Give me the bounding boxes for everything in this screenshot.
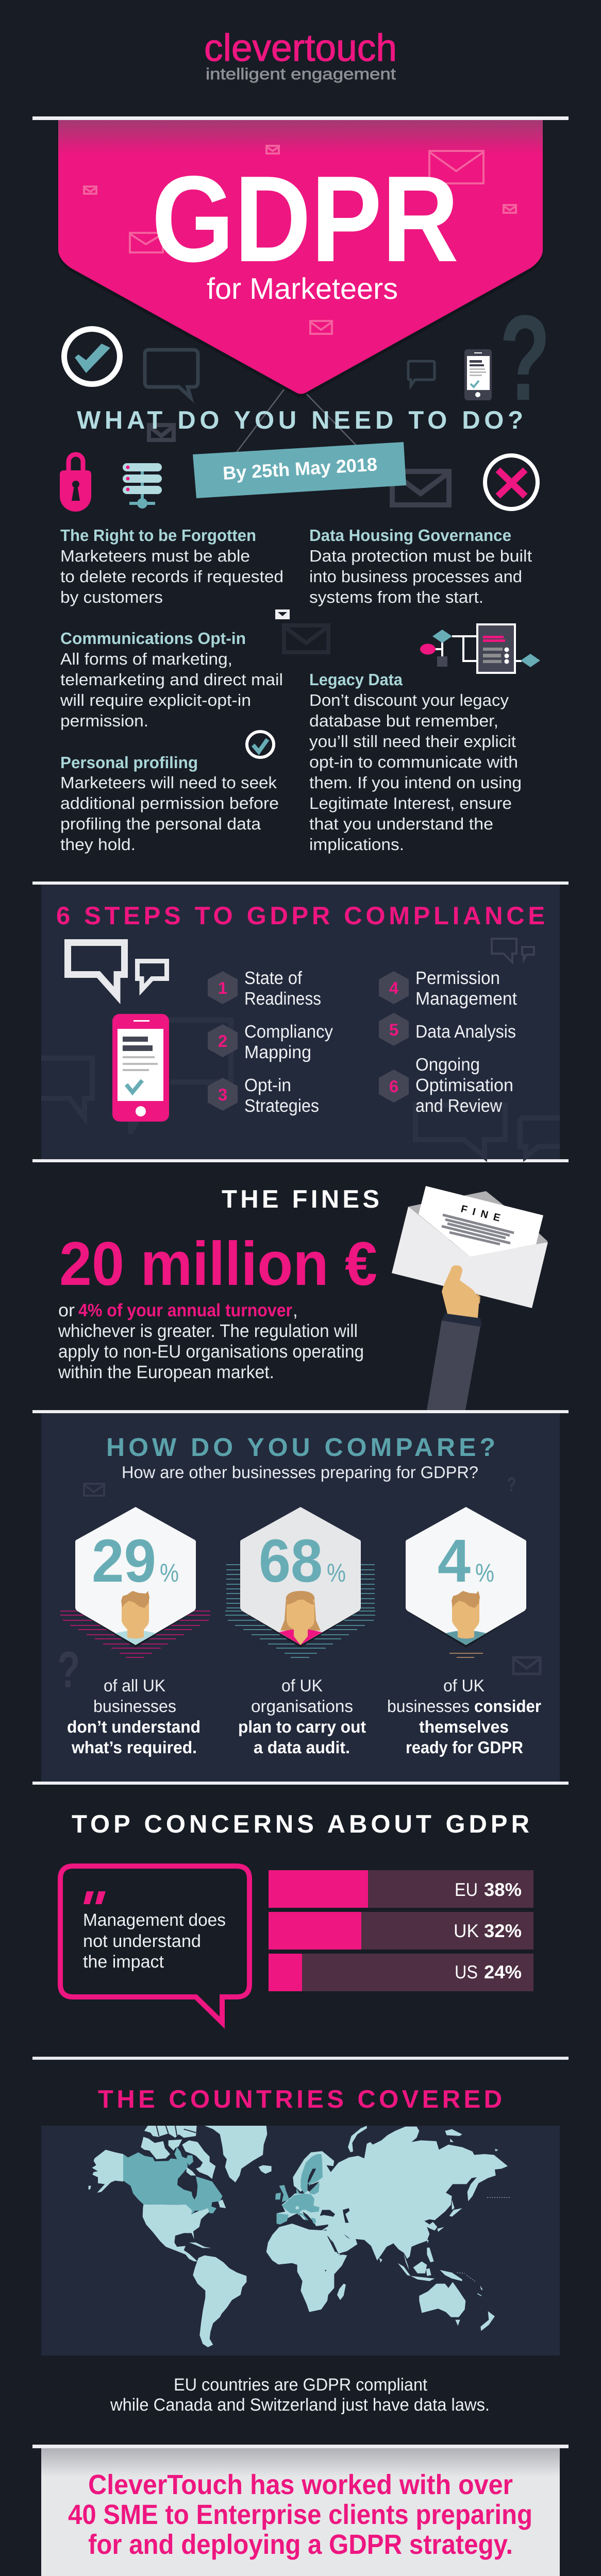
- text block: legacy data: [309, 670, 522, 854]
- heading: the fines: THE FINES: [222, 1185, 379, 1213]
- caption: 4 percent: consider: [474, 1697, 541, 1716]
- headline: clevertouch experience: 40 SME to Enterprise clients preparing: [68, 2499, 532, 2530]
- stat card: 68 percent: 68: [259, 1527, 323, 1595]
- step 4: 4: [389, 978, 399, 997]
- icon: small chat bubble: [408, 361, 435, 386]
- stat card: 68 percent: %: [327, 1558, 346, 1587]
- stat card: 4 percent: 4: [438, 1527, 471, 1595]
- step 2: 2: [218, 1031, 227, 1050]
- faint decorative icons: ?: [57, 1641, 80, 1699]
- step 5: Data Analysis: [415, 1022, 516, 1042]
- headline: clevertouch experience: CleverTouch has worked with over: [88, 2469, 513, 2500]
- icon: padlock: [60, 454, 91, 512]
- text block: personal profiling: [60, 753, 279, 854]
- deadline sign: By 25th May 2018: [222, 453, 378, 484]
- caption: 68 percent: of UK: [281, 1676, 323, 1695]
- step 5: 5: [389, 1020, 398, 1039]
- logo: top clevertouch: clevertouch: [204, 26, 397, 69]
- icon: check circle: [64, 329, 120, 384]
- caption: 68 percent: organisations: [251, 1697, 353, 1716]
- step 6: Ongoing: [415, 1055, 480, 1075]
- subheading: How are other businesses preparing for GDPR?: [122, 1463, 478, 1482]
- text block: legacy data: implications.: [309, 835, 404, 854]
- text block: legacy data: Legitimate Interest, ensure: [309, 794, 512, 812]
- text block: the right to be forgotten: to delete records if requested: [60, 567, 283, 586]
- step 2: Mapping: [244, 1042, 311, 1062]
- map caption: [110, 2375, 490, 2415]
- text block: personal profiling: Personal profiling: [60, 753, 198, 772]
- logo: top clevertouch: intelligent engagement: [206, 65, 396, 83]
- bar: UK 32%: [269, 1912, 533, 1950]
- text block: communications opt-in: All forms of marketing,: [60, 650, 232, 668]
- step 6: Optimisation: [415, 1075, 513, 1095]
- bar: US 24%: US: [455, 1961, 478, 1982]
- text block: personal profiling: profiling the personal data: [60, 815, 261, 833]
- callout: quote bubble: [60, 1866, 249, 2023]
- text block: data housing governance: Data Housing Governance: [309, 526, 511, 545]
- caption: 29 percent: don’t understand: [67, 1717, 201, 1736]
- text block: legacy data: opt-in to communicate with: [309, 753, 518, 771]
- text block: data housing governance: systems from the start.: [309, 588, 483, 606]
- caption: 29 percent: what’s required.: [71, 1738, 197, 1757]
- bar chart: [269, 1870, 533, 1991]
- text block: fines detail: apply to non-EU organisations operating: [58, 1342, 364, 1362]
- icon: flow diagram: [420, 624, 540, 673]
- section: the fines: [58, 1185, 548, 1410]
- person: male, light shirt: [115, 1591, 156, 1645]
- icon: question mark: ?: [499, 290, 550, 426]
- icon: pink phone: [112, 1014, 169, 1122]
- caption: 4 percent: [387, 1676, 541, 1757]
- subtitle: for Marketeers: for Marketeers: [207, 272, 398, 306]
- text block: legacy data: them. If you intend on using: [309, 773, 522, 792]
- headline: clevertouch experience: [68, 2469, 532, 2560]
- faint decorative icons: ?: [507, 1473, 516, 1496]
- stat card: 4 percent: [387, 1507, 541, 1757]
- stat card: 29 percent: [60, 1507, 210, 1757]
- icon: server: [123, 463, 162, 509]
- illustration: hand holding fine envelope: [392, 1186, 548, 1410]
- stat: 20 million euro: 20 million €: [59, 1229, 377, 1298]
- callout: quote bubble: the impact: [83, 1952, 164, 1972]
- icons: banner envelopes: [84, 146, 516, 334]
- faint decorative icons: [57, 1473, 540, 1699]
- text block: fines detail: 4% of your annual turnover: [78, 1300, 292, 1320]
- text block: personal profiling: Marketeers will need to seek: [60, 773, 277, 792]
- bar: UK 32%: UK: [454, 1920, 479, 1941]
- person: female, pink top: [279, 1591, 322, 1645]
- heading: how do you compare: HOW DO YOU COMPARE?: [106, 1433, 495, 1462]
- text block: fines detail: or: [58, 1300, 75, 1320]
- caption: 29 percent: of all UK: [104, 1676, 165, 1695]
- icon: phone: [464, 349, 492, 400]
- icon: cross circle: [485, 455, 538, 509]
- callout: quote bubble: not understand: [83, 1931, 201, 1951]
- text block: fines detail: within the European market.: [58, 1362, 274, 1382]
- text block: data housing governance: into business processes and: [309, 567, 522, 586]
- hero banner: [58, 120, 543, 398]
- deadline sign: [193, 442, 406, 498]
- caption: 4 percent: themselves: [419, 1717, 509, 1736]
- map caption: while Canada and Switzerland just have data laws.: [110, 2395, 490, 2415]
- step 5: [379, 1013, 516, 1046]
- caption: 4 percent: ready for GDPR: [406, 1738, 523, 1757]
- caption: 68 percent: a data audit.: [254, 1738, 350, 1757]
- panel: how do you compare: [32, 1410, 569, 1785]
- text block: legacy data: that you understand the: [309, 815, 493, 833]
- faint background bubbles: [41, 1020, 560, 1157]
- step 4: [379, 968, 517, 1009]
- icon: large speech bubble: [68, 943, 125, 995]
- step 2: [208, 1022, 333, 1062]
- step 3: [208, 1075, 319, 1116]
- bar: UK 32%: 32%: [484, 1920, 522, 1941]
- icon: small check circle: [247, 732, 274, 757]
- text block: communications opt-in: will require explicit-opt-in: [60, 691, 251, 709]
- world map: [41, 2126, 560, 2355]
- section: top concerns: [60, 1810, 533, 2023]
- title: GDPR: GDPR: [152, 151, 459, 287]
- caption: 4 percent: of UK: [443, 1676, 485, 1695]
- text block: legacy data: Legacy Data: [309, 670, 403, 689]
- bar: US 24%: 24%: [484, 1961, 522, 1982]
- bar: US 24%: [269, 1954, 533, 1991]
- text block: personal profiling: additional permission before: [60, 794, 279, 812]
- text block: data housing governance: [309, 526, 532, 606]
- caption: 4 percent: businesses: [387, 1697, 470, 1716]
- step 3: 3: [218, 1085, 227, 1104]
- heading: what do you need to do: WHAT DO YOU NEED TO DO?: [77, 406, 523, 434]
- callout: quote bubble: Management does: [83, 1910, 226, 1930]
- step 1: State of: [244, 968, 302, 988]
- headline: clevertouch experience: for and deploying a GDPR strategy.: [88, 2529, 513, 2560]
- person: male, teal shirt: [445, 1591, 487, 1645]
- text block: fines detail: whichever is greater. The regulation will: [58, 1321, 358, 1341]
- icon: dark envelope behind heading: [149, 425, 174, 440]
- text block: communications opt-in: [60, 629, 283, 730]
- panel: call to action: [32, 2445, 569, 2576]
- map: africa, eurasia and oceania: [266, 2126, 510, 2331]
- text block: data housing governance: Data protection must be built: [309, 547, 532, 565]
- bar: EU 38%: [269, 1870, 533, 1908]
- step 4: Management: [415, 989, 517, 1009]
- map caption: EU countries are GDPR compliant: [174, 2375, 428, 2395]
- step 6: 6: [389, 1077, 398, 1096]
- text block: the right to be forgotten: by customers: [60, 588, 163, 606]
- heading: top concerns: TOP CONCERNS ABOUT GDPR: [72, 1810, 529, 1838]
- text block: legacy data: you’ll still need their explicit: [309, 732, 516, 751]
- text block: communications opt-in: permission.: [60, 711, 148, 730]
- illustration: hand holding fine envelope: FINE: [460, 1204, 502, 1224]
- text block: communications opt-in: Communications Opt-in: [60, 629, 246, 648]
- step 3: Opt-in: [244, 1075, 291, 1095]
- step 2: Compliancy: [244, 1022, 333, 1042]
- icon: dark envelope: [284, 625, 328, 652]
- stat card: 4 percent: %: [475, 1558, 494, 1587]
- text block: the right to be forgotten: The Right to be Forgotten: [60, 526, 256, 545]
- icon: small speech bubble: [137, 961, 167, 990]
- panel: 6 steps: [32, 882, 569, 1162]
- stat card: 68 percent: [225, 1507, 375, 1757]
- text block: legacy data: database but remember,: [309, 711, 498, 730]
- step 6: [379, 1055, 513, 1116]
- step 1: [208, 968, 321, 1009]
- heading: 6 steps: 6 STEPS TO GDPR COMPLIANCE: [56, 902, 545, 930]
- step 4: Permission: [415, 968, 500, 988]
- text block: fines detail: ,: [293, 1300, 298, 1320]
- step 6: and Review: [415, 1096, 503, 1116]
- step 1: Readiness: [244, 989, 321, 1009]
- text block: communications opt-in: telemarketing and direct mail: [60, 670, 283, 689]
- caption: 29 percent: businesses: [93, 1697, 176, 1716]
- text block: personal profiling: they hold.: [60, 835, 136, 854]
- text block: legacy data: Don’t discount your legacy: [309, 691, 509, 709]
- caption: 68 percent: plan to carry out: [238, 1717, 366, 1736]
- text block: the right to be forgotten: [60, 526, 283, 606]
- caption: 68 percent: [238, 1676, 366, 1757]
- step 1: 1: [218, 978, 227, 997]
- step 3: Strategies: [244, 1096, 319, 1116]
- bar: EU 38%: 38%: [484, 1879, 522, 1900]
- icon: chat bubble outline: [145, 350, 198, 398]
- map: americas: [89, 2126, 272, 2347]
- text block: fines detail: [58, 1300, 364, 1382]
- sign strings: [226, 389, 368, 466]
- icon: large envelope: [392, 471, 449, 505]
- stat card: 29 percent: %: [160, 1558, 179, 1587]
- text block: the right to be forgotten: Marketeers must be able: [60, 547, 250, 565]
- heading: the countries covered: THE COUNTRIES COVERED: [98, 2086, 502, 2113]
- icon: tiny white envelope: [275, 609, 290, 619]
- bar: EU 38%: EU: [455, 1879, 478, 1900]
- stat card: 29 percent: 29: [92, 1527, 156, 1595]
- caption: 29 percent: [67, 1676, 201, 1757]
